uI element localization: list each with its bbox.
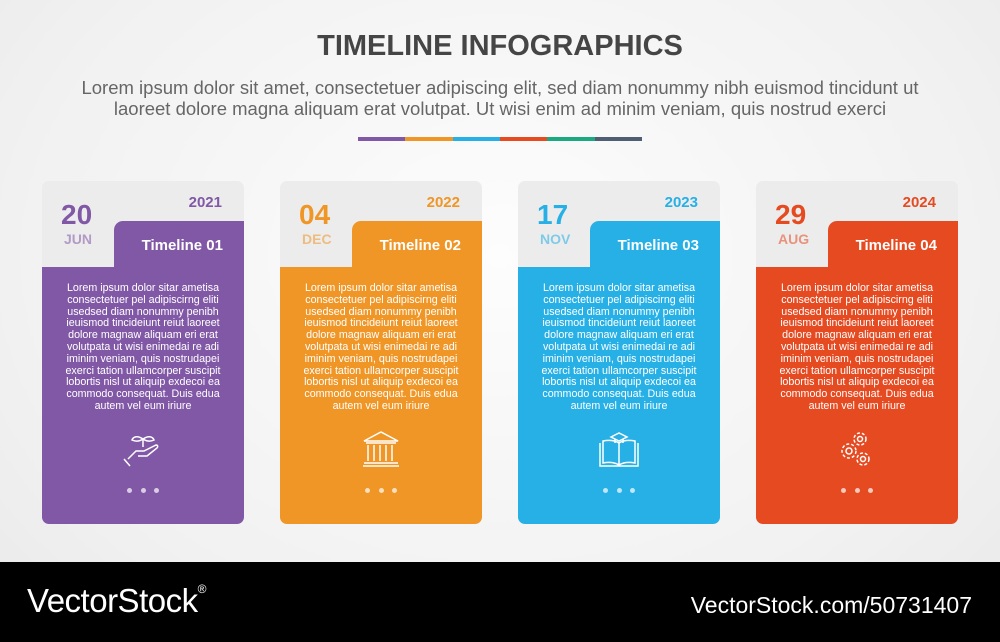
subtitle: laoreet dolore magna aliquam erat volutpat. Ut wisi enim ad minim veniam, quis nostrud exerci bbox=[114, 98, 886, 119]
body text: ieuismod tincideiunt reiut laoreet bbox=[66, 317, 220, 329]
icon: book with cap bbox=[599, 432, 639, 467]
body text: Lorem ipsum dolor sitar ametisa bbox=[781, 282, 933, 294]
body text: usedsed diam nonummy penibh bbox=[305, 306, 457, 318]
body text: volutpata ut wisi enimedai re adi bbox=[543, 341, 695, 353]
card 4 bbox=[756, 181, 958, 524]
body text: iminim veniam, quis nostrudapei bbox=[305, 353, 457, 365]
body text: iminim veniam, quis nostrudapei bbox=[781, 353, 933, 365]
body text: consectetuer pel adipiscirng eliti bbox=[67, 294, 219, 306]
body text: autem vel eum iriure bbox=[809, 400, 905, 412]
color divider bar bbox=[358, 137, 642, 141]
dots bbox=[365, 488, 397, 493]
tab: Timeline 01: Timeline 01 bbox=[142, 237, 223, 254]
body text bbox=[65, 282, 221, 412]
icon: hand with plant bbox=[124, 436, 158, 466]
body text: dolore magnaw aliquam eri erat bbox=[782, 329, 932, 341]
body text: iminim veniam, quis nostrudapei bbox=[543, 353, 695, 365]
body text: usedsed diam nonummy penibh bbox=[543, 306, 695, 318]
body text bbox=[541, 282, 697, 412]
icon: building bbox=[363, 431, 399, 467]
body text: lobortis nisl ut aliquip exdecoi ea bbox=[66, 376, 220, 388]
card 2 bbox=[280, 181, 482, 524]
tab: Timeline 04: Timeline 04 bbox=[856, 237, 937, 254]
body text: commodo consequat. Duis edua bbox=[304, 388, 458, 400]
body text: dolore magnaw aliquam eri erat bbox=[68, 329, 218, 341]
body text bbox=[303, 282, 459, 412]
body text: usedsed diam nonummy penibh bbox=[781, 306, 933, 318]
card 1 bbox=[42, 181, 244, 524]
body text: volutpata ut wisi enimedai re adi bbox=[305, 341, 457, 353]
body text: ieuismod tincideiunt reiut laoreet bbox=[780, 317, 934, 329]
body text: exerci tation ullamcorper suscipit bbox=[541, 365, 697, 377]
year: 2022 bbox=[427, 194, 460, 211]
dots bbox=[127, 488, 159, 493]
body text: consectetuer pel adipiscirng eliti bbox=[543, 294, 695, 306]
body text: autem vel eum iriure bbox=[571, 400, 667, 412]
body text: Lorem ipsum dolor sitar ametisa bbox=[543, 282, 695, 294]
date: 20 bbox=[61, 199, 92, 230]
body text: Lorem ipsum dolor sitar ametisa bbox=[305, 282, 457, 294]
body text: commodo consequat. Duis edua bbox=[780, 388, 934, 400]
tab: Timeline 02 bbox=[352, 221, 482, 271]
body text: exerci tation ullamcorper suscipit bbox=[65, 365, 221, 377]
tab: Timeline 01 bbox=[114, 221, 244, 271]
subtitle: Lorem ipsum dolor sit amet, consectetuer adipiscing elit, sed diam nonummy nibh euismod tincidunt ut bbox=[81, 77, 919, 98]
card 1: JUN bbox=[64, 231, 92, 247]
body text: autem vel eum iriure bbox=[95, 400, 191, 412]
date: 29 bbox=[775, 199, 806, 230]
year: 2021 bbox=[189, 194, 222, 211]
body text bbox=[779, 282, 935, 412]
card 4: AUG bbox=[778, 231, 809, 247]
body text: lobortis nisl ut aliquip exdecoi ea bbox=[542, 376, 696, 388]
card 2: DEC bbox=[302, 231, 332, 247]
body text: autem vel eum iriure bbox=[333, 400, 429, 412]
body text: ieuismod tincideiunt reiut laoreet bbox=[304, 317, 458, 329]
body text: usedsed diam nonummy penibh bbox=[67, 306, 219, 318]
tab: Timeline 04 bbox=[828, 221, 958, 271]
footer watermark bar bbox=[0, 562, 1000, 642]
body text: dolore magnaw aliquam eri erat bbox=[544, 329, 694, 341]
icon: gears bbox=[841, 432, 870, 466]
body text: exerci tation ullamcorper suscipit bbox=[303, 365, 459, 377]
body text: iminim veniam, quis nostrudapei bbox=[67, 353, 219, 365]
card 3 bbox=[518, 181, 720, 524]
body text: volutpata ut wisi enimedai re adi bbox=[67, 341, 219, 353]
year: 2023 bbox=[665, 194, 698, 211]
year: 2024 bbox=[903, 194, 936, 211]
footer watermark bar: VectorStock.com/50731407 bbox=[691, 592, 972, 618]
dots bbox=[603, 488, 635, 493]
tab: Timeline 03 bbox=[590, 221, 720, 271]
body text: commodo consequat. Duis edua bbox=[542, 388, 696, 400]
tab: Timeline 03: Timeline 03 bbox=[618, 237, 699, 254]
tab: Timeline 02: Timeline 02 bbox=[380, 237, 461, 254]
footer watermark bar: VectorStock® bbox=[27, 582, 206, 619]
card 3: NOV bbox=[540, 231, 570, 247]
body text: consectetuer pel adipiscirng eliti bbox=[781, 294, 933, 306]
title: TIMELINE INFOGRAPHICS bbox=[317, 30, 683, 62]
body text: Lorem ipsum dolor sitar ametisa bbox=[67, 282, 219, 294]
body text: consectetuer pel adipiscirng eliti bbox=[305, 294, 457, 306]
body text: commodo consequat. Duis edua bbox=[66, 388, 220, 400]
body text: lobortis nisl ut aliquip exdecoi ea bbox=[780, 376, 934, 388]
dots bbox=[841, 488, 873, 493]
body text: ieuismod tincideiunt reiut laoreet bbox=[542, 317, 696, 329]
body text: exerci tation ullamcorper suscipit bbox=[779, 365, 935, 377]
date: 17 bbox=[537, 199, 568, 230]
body text: dolore magnaw aliquam eri erat bbox=[306, 329, 456, 341]
subtitle bbox=[81, 77, 919, 119]
body text: lobortis nisl ut aliquip exdecoi ea bbox=[304, 376, 458, 388]
date: 04 bbox=[299, 199, 330, 230]
body text: volutpata ut wisi enimedai re adi bbox=[781, 341, 933, 353]
